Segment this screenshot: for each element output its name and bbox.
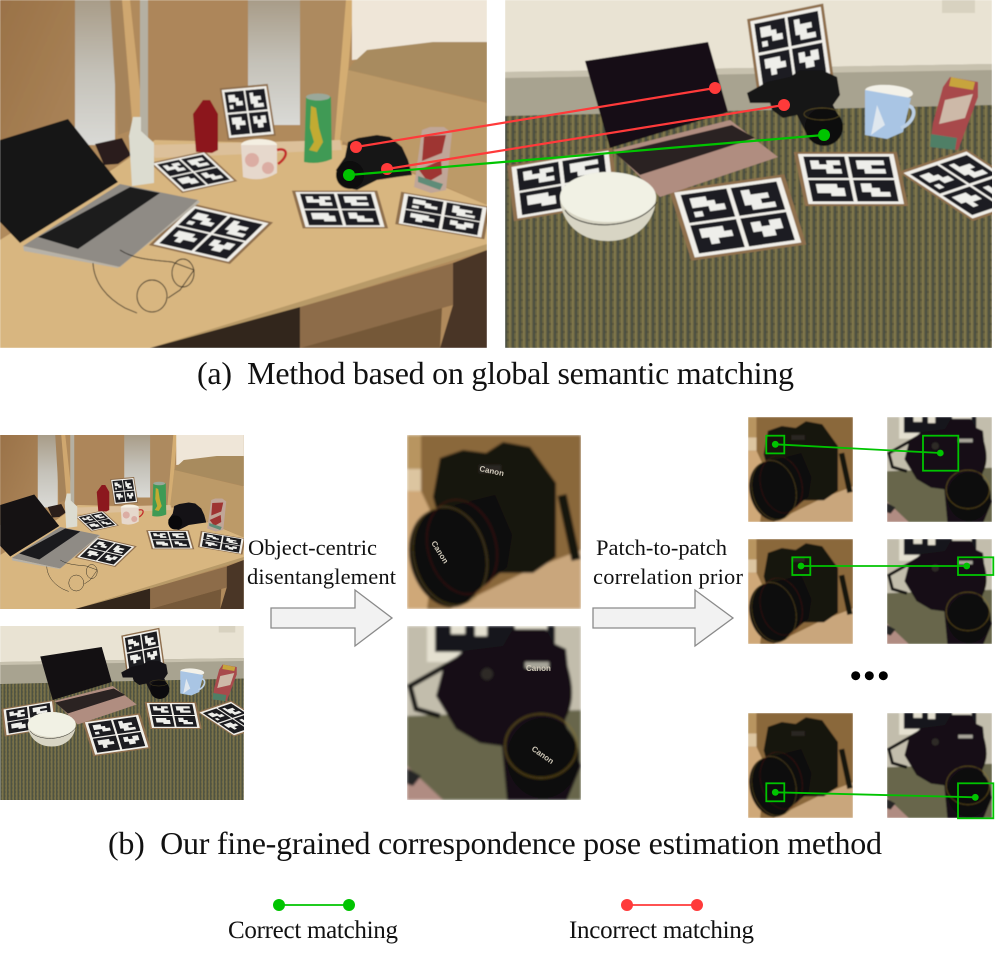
step label: patch-to-patch correlation prior <box>593 535 744 589</box>
small photo: floor scene <box>0 626 244 800</box>
legend: incorrect matching: Incorrect matching <box>569 917 754 944</box>
arrow: to patch correspondences <box>593 590 733 646</box>
camera crop: floor view <box>407 626 581 800</box>
arrow: to object crops <box>271 590 392 646</box>
camera crop: floor view: Canon <box>526 664 551 673</box>
step label: object-centric disentanglement: disentanglement <box>247 564 397 589</box>
camera crop: desk view <box>407 435 581 609</box>
photo: floor scene (target view) <box>505 0 992 348</box>
patch match: row 3 <box>766 783 993 818</box>
step label: object-centric disentanglement: Object-centric <box>248 535 377 560</box>
legend: correct matching <box>228 899 398 944</box>
photo: desk scene (source view) <box>0 0 487 348</box>
thumbnail grid: camera crop pairs <box>743 417 992 822</box>
camera crop: floor view: Canon <box>530 744 555 766</box>
step label: object-centric disentanglement <box>247 535 397 589</box>
step label: patch-to-patch correlation prior: correlation prior <box>593 564 744 589</box>
caption (a): (a) Method based on global semantic matching <box>197 355 794 391</box>
patch match: row 2 <box>792 557 993 575</box>
ellipsis dots <box>851 671 888 680</box>
step label: patch-to-patch correlation prior: Patch-to-patch <box>596 535 727 560</box>
camera crop: desk view: Canon <box>429 539 450 565</box>
matching lines: global semantic matching <box>343 82 830 181</box>
caption (b): (b) Our fine-grained correspondence pose estimation method <box>108 825 882 861</box>
small photo: desk scene <box>0 435 244 609</box>
legend: incorrect matching <box>569 899 754 944</box>
legend: correct matching: Correct matching <box>228 917 398 944</box>
camera crop: desk view: Canon <box>479 464 505 478</box>
patch match: row 1 <box>766 436 958 471</box>
